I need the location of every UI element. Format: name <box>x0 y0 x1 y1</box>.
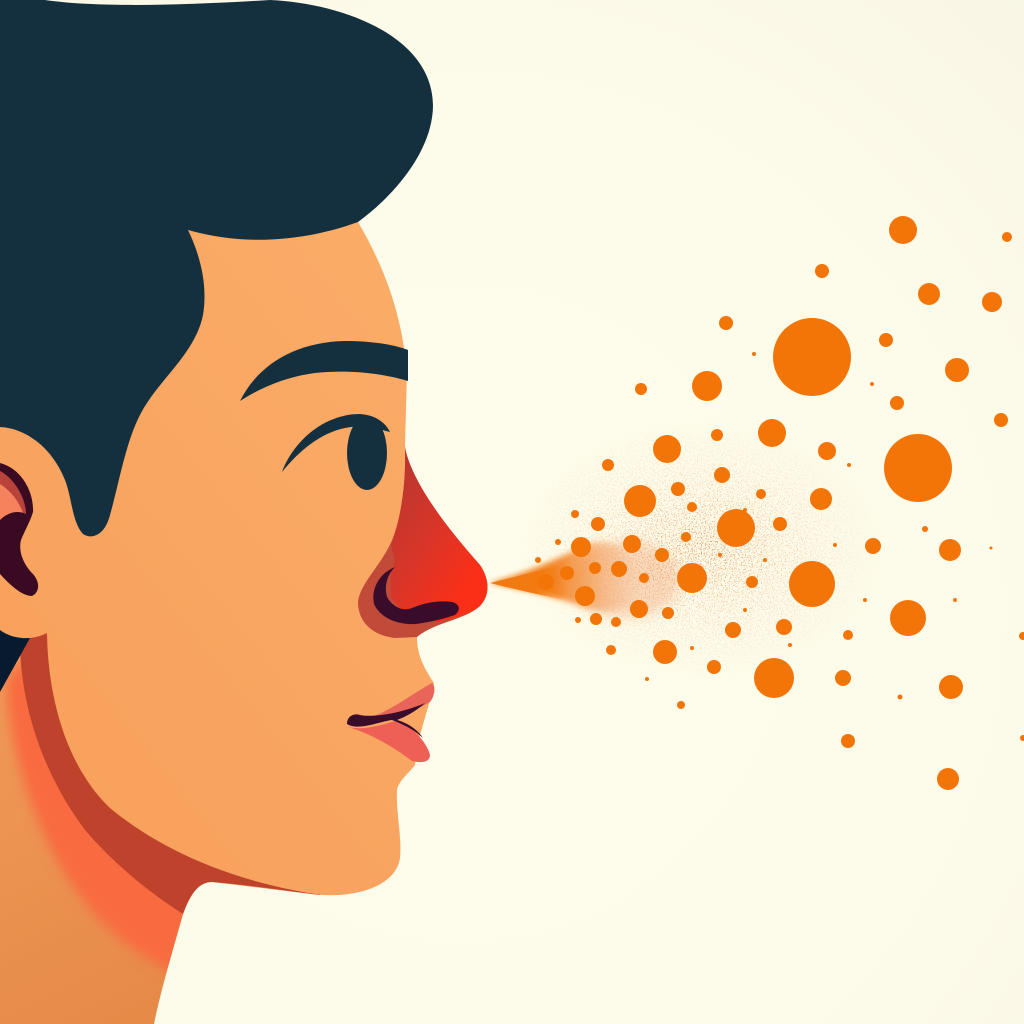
spray jet tip <box>490 564 565 600</box>
eyebrow <box>240 341 408 401</box>
spray mist speckle <box>515 420 885 680</box>
neck dark shadow <box>20 633 320 914</box>
neck coral shadow <box>6 640 200 975</box>
nose base shadow <box>358 448 488 638</box>
spray cone <box>490 542 642 611</box>
face <box>0 215 434 895</box>
nose <box>358 448 488 638</box>
hair behind ear <box>0 626 30 692</box>
eye <box>282 414 390 490</box>
hair <box>0 0 433 536</box>
ear <box>0 463 38 596</box>
neck <box>0 630 320 1024</box>
pupil <box>347 416 387 490</box>
ear inner <box>0 470 27 525</box>
ear inner light <box>0 484 24 522</box>
ear dark fold <box>0 463 38 596</box>
lower lip <box>348 720 430 762</box>
eyelid <box>282 414 390 472</box>
upper lip <box>372 683 434 718</box>
mouth <box>347 683 434 762</box>
spray cloud <box>490 420 885 680</box>
nostril line <box>373 567 459 624</box>
nose red area <box>391 448 488 622</box>
droplets <box>535 216 1024 790</box>
lip line <box>347 703 425 738</box>
